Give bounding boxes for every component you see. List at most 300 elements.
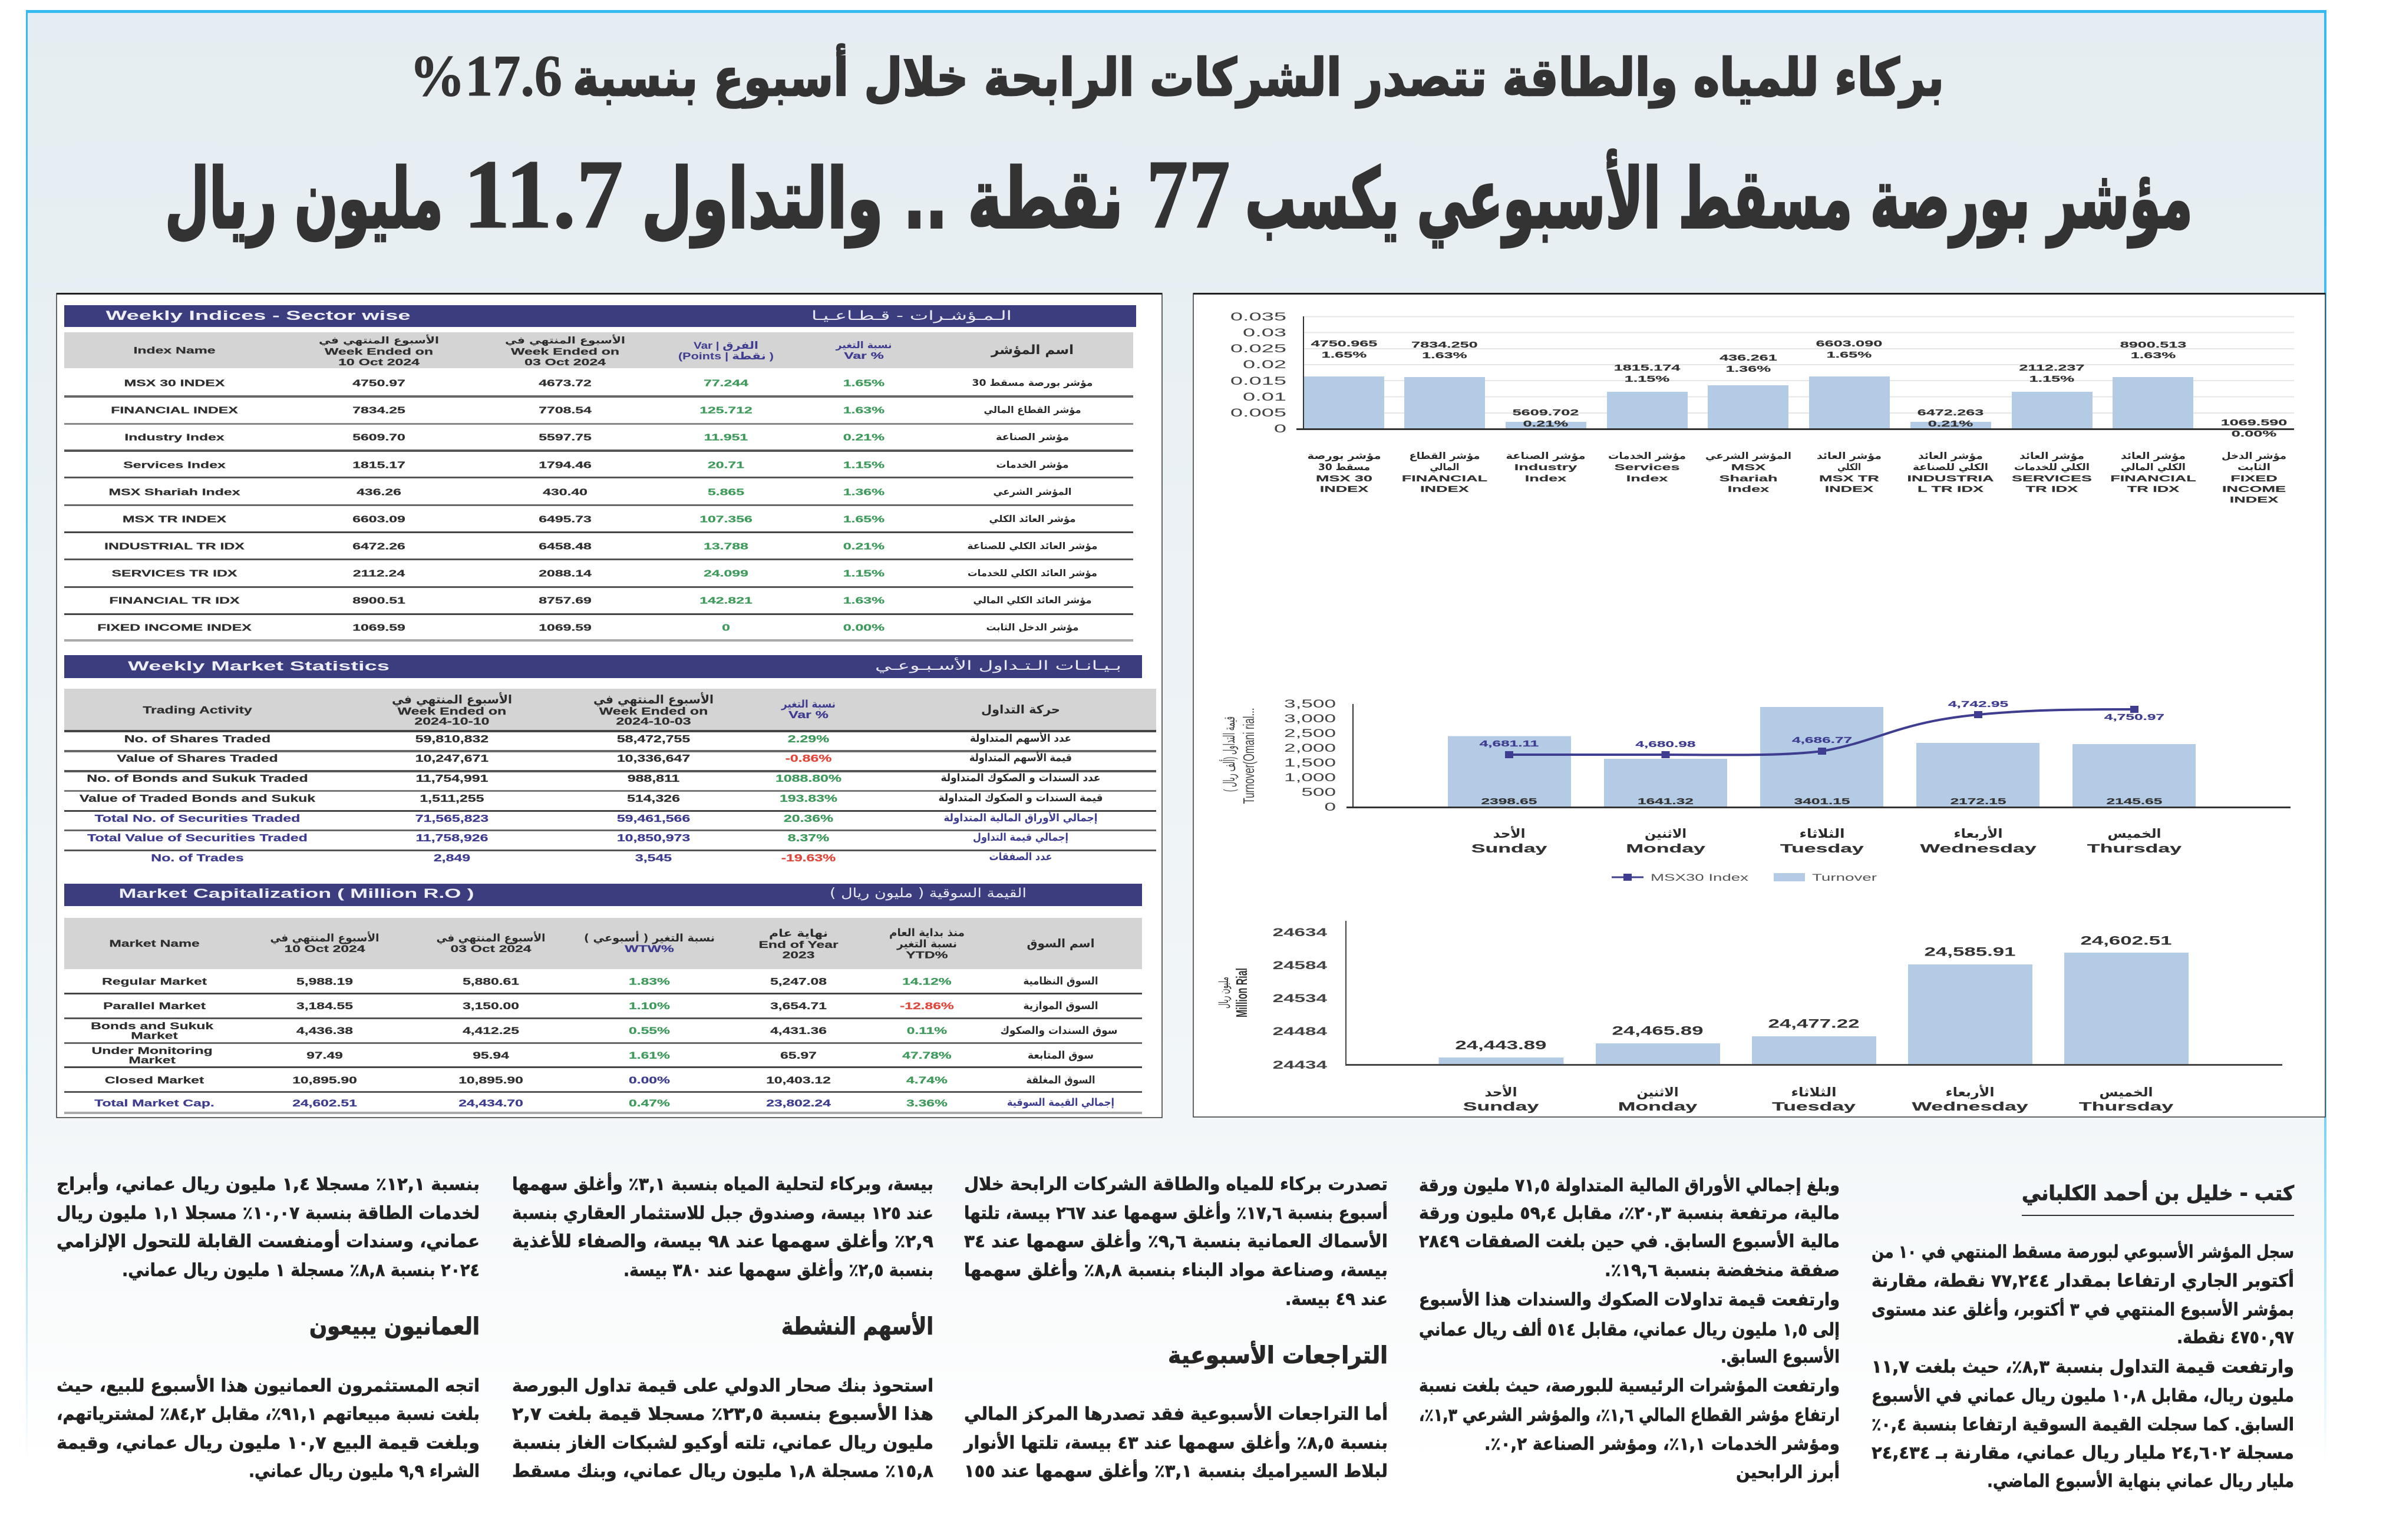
rows: indices: MSX 30 INDEX — [124, 378, 225, 388]
text block: gainers continued: ٢,٩٪ وأغلق سهمها عند ٩٨ بيسة، والصفاء للأغذية — [512, 1230, 933, 1252]
rows: capitalization: 0.11% — [907, 1026, 947, 1036]
data labels — [1455, 934, 2172, 1052]
rows: statistics: Total No. of Securities Traded — [95, 813, 300, 824]
category labels latin: SERVICES — [2012, 473, 2092, 483]
y axis labels: 2,000 — [1284, 742, 1336, 754]
value labels: 1.15% — [1625, 374, 1669, 384]
data labels: 4,750.97 — [2104, 712, 2164, 722]
rows: statistics: 10,850,973 — [617, 832, 690, 844]
rows: indices: Industry Index — [124, 432, 225, 442]
category labels latin: INDEX — [2230, 494, 2279, 504]
data labels: 2398.65 — [1481, 797, 1537, 807]
y axis labels: 0.035 — [1230, 311, 1286, 323]
category labels arabic: مؤشر العائد — [1817, 450, 1882, 461]
category labels latin: FINANCIAL — [1402, 473, 1487, 483]
rows: statistics: Value of Traded Bonds and Sukuk — [80, 793, 315, 804]
text block: weekly declines: لبلاط السيراميك بنسبة ٣,١٪ وأغلق سهمها عند ١٥٥ — [964, 1459, 1388, 1482]
data labels: 4,742.95 — [1948, 699, 2008, 709]
row lines: capitalization — [64, 993, 1142, 1114]
category labels arabic: مؤشر العائد — [1918, 450, 1983, 461]
rows: capitalization: Closed Market — [105, 1075, 204, 1086]
rows: indices: 0 — [722, 623, 730, 633]
category labels arabic: مؤشر الصناعة — [1506, 450, 1585, 461]
rows: indices: 7834.25 — [352, 405, 405, 415]
data labels: 24,443.89 — [1455, 1039, 1546, 1052]
day labels: الأحد — [1493, 825, 1525, 841]
table header row: statistics: الأسبوع المنتهي في — [593, 692, 714, 707]
rows: statistics: 58,472,755 — [617, 733, 690, 745]
rows: capitalization: 1.83% — [629, 976, 670, 987]
rows: indices: مؤشر الخدمات — [996, 459, 1069, 470]
table header row: statistics: Trading Activity — [143, 705, 252, 716]
rows: capitalization: Under Monitoring — [91, 1046, 213, 1056]
heading bar: weekly indices — [64, 305, 1136, 327]
text block: intro: سجل المؤشر الأسبوعي لبورصة مسقط المنتهي في ١٠ من — [1872, 1241, 2294, 1263]
text block: top gainers — [964, 1174, 1388, 1310]
rows: capitalization: 10,895.90 — [458, 1075, 523, 1086]
rows: indices: مؤشر القطاع المالي — [984, 404, 1081, 416]
article column 4 — [512, 1172, 933, 1482]
text block: active stocks continued: عماني، وسندات أومنفست القابلة للتحول الإلزامي — [57, 1230, 480, 1252]
table header row: capitalization: 2023 — [783, 950, 814, 961]
value labels: 6603.090 — [1816, 338, 1882, 348]
rows: indices: MSX Shariah Index — [108, 487, 240, 497]
table header row: capitalization — [64, 918, 1142, 969]
rows: statistics: 2,849 — [434, 852, 470, 864]
rows: indices: 1069.59 — [352, 623, 405, 633]
value labels: 5609.702 — [1513, 407, 1579, 417]
rows: statistics: 2.29% — [788, 733, 829, 745]
rows: capitalization: 1.61% — [629, 1050, 670, 1061]
y axis labels: 0 — [1324, 801, 1336, 813]
heading bar: market capitalization — [64, 884, 1142, 906]
rows: indices: 20.71 — [708, 460, 744, 470]
row lines: indices — [64, 395, 1133, 642]
category labels latin: FINANCIAL — [2110, 473, 2196, 483]
legend — [1612, 872, 1877, 883]
category labels arabic: مؤشر الدخل — [2222, 450, 2286, 461]
category labels arabic: مؤشر العائد — [2019, 450, 2084, 461]
day labels: Monday — [1626, 842, 1705, 855]
rows: indices: 6495.73 — [539, 514, 592, 524]
MSX30 index line — [1505, 706, 2138, 758]
table header row: indices: Week Ended on — [511, 347, 619, 357]
rows: indices: مؤشر بورصة مسقط 30 — [972, 377, 1093, 388]
day labels: الأربعاء — [1946, 1084, 1994, 1099]
rows: capitalization: Parallel Market — [103, 1001, 206, 1012]
rows: capitalization: 10,403.12 — [766, 1075, 831, 1086]
panel: charts — [1193, 293, 2325, 1117]
text block: active stocks: ١٥,٨٪ مسجلة ١,٨ مليون ريال عماني، وبنك مسقط — [512, 1461, 933, 1482]
category labels latin: INDEX — [1320, 484, 1369, 494]
rows: indices: 107.356 — [699, 514, 753, 524]
rows: indices: FIXED INCOME INDEX — [97, 623, 252, 633]
rows: statistics: 71,565,823 — [415, 813, 489, 824]
article column 2: وارتفعت المؤشرات الرئيسية للبورصة، حيث بلغت نسبة — [1419, 1376, 1840, 1396]
day labels: Sunday — [1471, 842, 1547, 855]
rows: indices: FINANCIAL TR IDX — [109, 596, 240, 606]
rows: indices: FINANCIAL INDEX — [111, 405, 238, 415]
rows: indices: 5597.75 — [539, 432, 592, 442]
rows: statistics: 1088.80% — [775, 773, 841, 784]
text block: Omanis sell: بلغت نسبة مبيعاتهم ٩١,١٪، مقابل ٨٤,٢٪ لمشترياتهم، — [57, 1404, 480, 1425]
rows: statistics: No. of Shares Traded — [124, 733, 270, 745]
text block: active stocks: استحوذ بنك صحار الدولي على قيمة تداول البورصة — [512, 1376, 933, 1396]
article column 2: صفقة منخفضة بنسبة ١٩,٦٪. — [1605, 1260, 1840, 1281]
text block: gainers continued: بنسبة ٢,٥٪ وأغلق سهمها عند ٣٨٠ بيسة. — [623, 1258, 933, 1281]
category labels latin: MSX — [1731, 462, 1766, 472]
day labels: Wednesday — [1912, 1101, 2028, 1113]
article column 2: مالية الأسبوع السابق. في حين بلغت الصفقات ٢٨٤٩ — [1419, 1230, 1840, 1252]
category labels arabic: مؤشر القطاع — [1410, 450, 1480, 461]
day labels: الأربعاء — [1954, 825, 2002, 841]
table: weekly market statistics — [64, 655, 1156, 864]
text block: active stocks: هذا الأسبوع بنسبة ٢٣,٥٪ مسجلا قيمة بلغت ٢,٧ — [512, 1403, 933, 1425]
table header row: capitalization: اسم السوق — [1027, 936, 1095, 950]
article column 2: ارتفاع مؤشر القطاع المالي ١,٦٪، والمؤشر الشرعي ١,٣٪، — [1419, 1405, 1840, 1426]
rows: indices: 1.63% — [843, 405, 885, 415]
rows: capitalization: 4,436.38 — [296, 1026, 353, 1036]
category labels arabic: مسقط 30 — [1318, 461, 1370, 472]
text block: top gainers: بيسة، وصناعة مواد البناء بنسبة ٨,٨٪ وأغلق سهمها — [964, 1258, 1388, 1281]
y axis title — [1216, 968, 1250, 1017]
value labels: 1.15% — [2029, 374, 2074, 384]
title: subheading: %17.6 — [410, 43, 562, 108]
data labels: 4,686.77 — [1792, 735, 1852, 745]
text block: Omanis sell: وبلغت قيمة البيع ١٠,٧ مليون ريال عماني، وقيمة — [57, 1433, 480, 1453]
heading: weekly declines: التراجعات الأسبوعية — [1168, 1340, 1388, 1369]
rows: capitalization: -12.86% — [900, 1001, 954, 1012]
rows: capitalization: 3,654.71 — [770, 1001, 827, 1012]
heading bar: market statistics — [64, 655, 1142, 678]
rows: capitalization: 4,431.36 — [770, 1026, 827, 1036]
rows: statistics: 11,754,991 — [415, 773, 488, 784]
rows: capitalization: 5,988.19 — [296, 976, 353, 987]
legend: MSX30 Index — [1651, 872, 1749, 883]
text block: gainers continued — [512, 1172, 933, 1281]
table header row: indices — [64, 332, 1133, 368]
text block: Omanis sell: الشراء ٩,٩ مليون ريال عماني. — [249, 1461, 480, 1482]
rows: statistics: إجمالي الأوراق المالية المتداولة — [944, 811, 1097, 824]
rows: capitalization: 5,880.61 — [463, 976, 519, 987]
y axis labels: 24534 — [1273, 992, 1327, 1004]
text block: intro: مليار ريال عماني بنهاية الأسبوع الماضي. — [1987, 1470, 2294, 1492]
data labels: 4,680.98 — [1635, 739, 1696, 749]
rows: capitalization: 3,184.55 — [296, 1001, 353, 1012]
rows: indices: 13.788 — [704, 541, 748, 551]
title: main headline: نقطة .. والتداول — [642, 151, 1123, 248]
y axis labels: 1,000 — [1284, 771, 1336, 784]
day labels: الخميس — [2099, 1085, 2153, 1099]
value labels: 1.63% — [2131, 350, 2176, 360]
category labels arabic: الثابت — [2237, 461, 2270, 472]
gridlines — [1303, 317, 2294, 413]
rows: capitalization: 65.97 — [780, 1050, 817, 1061]
table header row: statistics: 2024-10-03 — [616, 716, 691, 727]
rows: capitalization: 0.47% — [629, 1098, 670, 1109]
rows: indices: 6472.26 — [352, 541, 405, 551]
value labels: 7834.250 — [1411, 339, 1478, 349]
rows: indices: 2112.24 — [353, 569, 405, 579]
y axis title: ( قيمة التداول (ألف ريال — [1219, 716, 1239, 792]
heading bar: weekly indices: Weekly Indices - Sector wise — [106, 308, 410, 323]
rows: statistics: قيمة السندات و الصكوك المتداولة — [938, 792, 1103, 804]
day labels: Wednesday — [1920, 842, 2037, 855]
category labels arabic: الكلي المالي — [2121, 461, 2186, 473]
y axis labels: 0.03 — [1243, 327, 1286, 339]
rows: statistics: عدد السندات و الصكوك المتداولة — [940, 772, 1101, 784]
rows: indices: 6458.48 — [539, 541, 592, 551]
axes — [1296, 316, 2294, 430]
y axis labels: 0.005 — [1230, 407, 1286, 419]
rows: statistics: 514,326 — [627, 793, 680, 804]
rows: indices: 4750.97 — [352, 378, 405, 388]
rows: capitalization: 3,150.00 — [463, 1001, 519, 1012]
y axis labels — [1284, 698, 1336, 813]
category labels latin: INCOME — [2222, 484, 2286, 494]
article column 1 — [1872, 1180, 2294, 1492]
rows: statistics: 3,545 — [635, 852, 672, 864]
title: subheading: بركاء للمياه والطاقة تتصدر الشركات الرابحة خلال أسبوع بنسبة — [573, 44, 1944, 108]
y axis labels — [1230, 311, 1286, 435]
rows: indices: 1794.46 — [539, 460, 592, 470]
category labels latin: FIXED — [2230, 473, 2278, 483]
rows: capitalization — [91, 975, 1117, 1109]
rows: indices: 5609.70 — [352, 432, 405, 442]
article column 2: الأسبوع السابق. — [1721, 1346, 1840, 1367]
y axis labels: 3,000 — [1284, 712, 1336, 725]
rows: indices: 1.36% — [843, 487, 885, 497]
category labels latin — [1316, 462, 2286, 504]
category labels latin: MSX 30 — [1316, 473, 1372, 483]
heading: active stocks: الأسهم النشطة — [781, 1311, 933, 1340]
text block: weekly declines — [963, 1402, 1388, 1482]
data labels — [1480, 699, 2164, 807]
rows: capitalization: Bonds and Sukuk — [91, 1021, 213, 1032]
axes — [1346, 704, 2291, 808]
y axis labels: 24634 — [1273, 926, 1327, 938]
rows: statistics: 59,461,566 — [617, 813, 690, 824]
rows: capitalization: 95.94 — [473, 1050, 509, 1061]
text block: gainers continued: عند ١٢٥ بيسة، وصندوق جبل للاستثمار العقاري بنسبة — [512, 1203, 933, 1224]
data labels: 3401.15 — [1794, 797, 1850, 807]
table header row: indices: Week Ended on — [325, 347, 433, 357]
text block: Omanis sell: اتجه المستثمرون العمانيون هذا الأسبوع للبيع، حيث — [57, 1374, 480, 1396]
text block: intro: بمؤشر الأسبوع المنتهي في ٣ أكتوبر، وأغلق عند مستوى — [1872, 1298, 2294, 1320]
table header row: indices: (Points | نقطة ) — [678, 351, 774, 362]
category labels latin: TR IDX — [2026, 484, 2078, 494]
day labels — [1463, 1084, 2173, 1113]
category labels arabic: المالي — [1430, 461, 1459, 473]
y axis labels: 1,500 — [1284, 756, 1336, 769]
table header row: statistics: نسبة التغير — [781, 698, 836, 710]
value labels: 1069.590 — [2221, 417, 2287, 427]
table header row: statistics: Var % — [788, 709, 829, 721]
data labels: 2145.65 — [2107, 797, 2163, 807]
rows: statistics: عدد الصفقات — [989, 851, 1052, 863]
rows: statistics — [80, 732, 1103, 864]
y axis title: Million Rial — [1233, 968, 1250, 1017]
value labels — [1311, 338, 2287, 438]
day labels: Sunday — [1463, 1101, 1539, 1113]
table: market capitalization — [64, 884, 1142, 1114]
text block: intro: ٤٧٥٠,٩٧ نقطة. — [2177, 1327, 2294, 1348]
rows: capitalization: Total Market Cap. — [94, 1098, 214, 1109]
category labels latin: L TR IDX — [1918, 484, 1984, 494]
rows: capitalization: السوق الموازية — [1023, 1000, 1098, 1012]
rows: indices: 142.821 — [699, 596, 753, 606]
rows: capitalization: 5,247.08 — [770, 976, 827, 987]
rows: capitalization: 4.74% — [906, 1075, 948, 1086]
rows: indices: Services Index — [123, 460, 226, 470]
table header row: statistics: Week Ended on — [398, 706, 506, 717]
article column 3 — [963, 1174, 1388, 1482]
rows: indices: مؤشر العائد الكلي المالي — [973, 594, 1091, 606]
category labels arabic: المؤشر الشرعي — [1705, 450, 1791, 462]
rows: indices: 11.951 — [704, 432, 748, 442]
bars — [1439, 953, 2189, 1065]
text block: intro: مليون ريال، مقابل ١٠,٨ مليون ريال عماني في الأسبوع — [1872, 1384, 2294, 1406]
title: main headline: 11.7 — [463, 140, 623, 249]
category labels arabic — [1307, 450, 2286, 473]
axes — [1345, 921, 2282, 1066]
heading bar: market statistics: Weekly Market Statistics — [128, 659, 390, 673]
data labels: 4,681.11 — [1480, 739, 1539, 749]
value labels: 436.261 — [1720, 352, 1777, 362]
text block: top gainers: تصدرت بركاء للمياه والطاقة الشركات الرابحة خلال — [964, 1174, 1388, 1195]
rows: indices: 0.21% — [843, 432, 885, 442]
text block: active stocks continued: ٢٠٢٤ بنسبة ٨,٨٪ مسجلة ١ مليون ريال عماني. — [122, 1260, 480, 1281]
rows: capitalization: 97.49 — [306, 1050, 343, 1061]
table header row: indices: Var % — [844, 351, 884, 361]
table header row: capitalization: نهاية عام — [769, 927, 828, 940]
rows: statistics: إجمالي قيمة التداول — [973, 831, 1068, 844]
rows: indices: مؤشر العائد الكلي — [989, 513, 1076, 525]
rows: indices: 5.865 — [708, 487, 744, 497]
category labels latin: INDUSTRIA — [1907, 473, 1994, 483]
value labels: 6472.263 — [1918, 407, 1984, 417]
bars — [1303, 376, 2193, 429]
text block: top gainers: الأسماك العمانية بنسبة ٩,٦٪ وأغلق سهمها عند ٣٤ — [964, 1230, 1388, 1252]
text block: active stocks: مليون ريال عماني، تلته أوكيو لشبكات الغاز بنسبة — [512, 1431, 933, 1453]
rows: indices: 0.00% — [843, 623, 885, 633]
rows: capitalization: 23,802.24 — [766, 1098, 831, 1109]
rows: capitalization: 10,895.90 — [292, 1075, 357, 1086]
text block: gainers continued: بيسة، وبركاء لتحلية المياه بنسبة ٣,١٪ وأغلق سهمها — [512, 1172, 933, 1195]
rows: capitalization: 24,434.70 — [458, 1098, 523, 1109]
rows: indices: 4673.72 — [539, 378, 592, 388]
text block: intro — [1872, 1241, 2294, 1492]
category labels latin: Index — [1728, 484, 1769, 494]
rows: statistics: 1,511,255 — [420, 793, 484, 804]
rows: indices: 436.26 — [357, 487, 401, 497]
legend: Turnover — [1812, 872, 1877, 883]
rows: indices: 7708.54 — [539, 405, 592, 415]
category labels latin: MSX TR — [1819, 473, 1879, 483]
value labels: 1.65% — [1827, 349, 1872, 359]
value labels: 4750.965 — [1311, 338, 1377, 348]
rows: indices: 2088.14 — [539, 569, 592, 579]
chart: market capitalization by day — [1216, 921, 2282, 1113]
day labels: الاثنين — [1637, 1085, 1678, 1099]
rows: statistics: 10,247,671 — [415, 753, 489, 764]
day labels — [1471, 825, 2182, 855]
rows: indices: 8900.51 — [352, 596, 405, 606]
rows: capitalization: 47.78% — [902, 1050, 952, 1061]
text block: intro: وارتفعت قيمة التداول بنسبة ٨,٣٪، حيث بلغت ١١,٧ — [1872, 1357, 2294, 1377]
category labels latin: Index — [1626, 473, 1668, 483]
article column 2: مالية، مرتفعة بنسبة ٢٠,٣٪، مقابل ٥٩,٤ مليون ورقة — [1419, 1203, 1840, 1224]
value labels: 1.63% — [1422, 350, 1467, 360]
title: main headline: 77 — [1146, 140, 1230, 249]
data labels: 2172.15 — [1951, 797, 2006, 807]
rows: capitalization: سوق المتابعة — [1028, 1049, 1094, 1062]
data labels: 24,465.89 — [1612, 1024, 1704, 1038]
rows: indices: مؤشر الصناعة — [996, 431, 1069, 442]
table header row: capitalization: WTW% — [625, 944, 674, 954]
y axis labels: 24484 — [1273, 1025, 1327, 1037]
rows: indices: 1.65% — [843, 514, 885, 524]
rows: indices: مؤشر الدخل الثابت — [986, 622, 1078, 633]
rows: indices: المؤشر الشرعي — [994, 486, 1071, 498]
category labels arabic: مؤشر العائد — [2121, 450, 2186, 461]
title: main headline: مليون ريال — [165, 151, 443, 248]
day labels: الخميس — [2107, 827, 2161, 841]
y axis labels: 0 — [1274, 423, 1286, 435]
rows: statistics: -19.63% — [781, 852, 836, 864]
category labels arabic: الكلي للصناعة — [1913, 461, 1988, 473]
y axis labels: 3,500 — [1284, 698, 1336, 710]
chart: turnover and MSX30 index — [1219, 698, 2291, 883]
rows: indices: 1069.59 — [539, 623, 592, 633]
table header row: indices: 10 Oct 2024 — [338, 358, 420, 368]
rows: statistics: 11,758,926 — [415, 832, 488, 844]
table header row: capitalization: Market Name — [109, 938, 200, 949]
text block: intro: السابق. كما سجلت القيمة السوقية ارتفاعا بنسبة ٠,٤٪ — [1872, 1415, 2294, 1435]
rows: indices: 1.15% — [843, 569, 885, 579]
table header row: capitalization: End of Year — [758, 940, 839, 950]
table header row: indices: Index Name — [133, 346, 216, 356]
rows: statistics: No. of Bonds and Sukuk Traded — [87, 773, 308, 784]
rows: statistics: 988,811 — [628, 773, 679, 784]
rows: statistics: Value of Shares Traded — [117, 753, 278, 764]
table header row: indices: نسبة التغير — [835, 339, 892, 351]
table header row: indices: الأسبوع المنتهي في — [319, 335, 439, 346]
rows: capitalization: 24,602.51 — [292, 1098, 357, 1109]
text block: intro: أكتوبر الجاري ارتفاعا بمقدار ٧٧,٢٤٤ نقطة، مقارنة — [1872, 1269, 2294, 1291]
table: weekly indices sector wise — [64, 305, 1136, 642]
data labels: 24,585.91 — [1925, 945, 2016, 959]
rows: indices: 1815.17 — [352, 460, 405, 470]
rows: indices: 430.40 — [543, 487, 588, 497]
table header row: capitalization: 03 Oct 2024 — [451, 944, 532, 954]
category labels latin: INDEX — [1420, 484, 1469, 494]
value labels: 1815.174 — [1614, 362, 1681, 372]
category labels latin: Services — [1615, 462, 1680, 472]
day labels: Tuesday — [1780, 842, 1864, 855]
y axis labels: 500 — [1301, 786, 1336, 798]
rows: statistics: 59,810,832 — [415, 733, 489, 745]
chart: weekly index change by sector — [1230, 311, 2294, 504]
heading bar: market statistics: بـيـانـات الـتـداول الأسـبـوعـي — [875, 657, 1121, 673]
text block: active stocks continued: لخدمات الطاقة بنسبة ١٠,٠٧٪ مسجلا ١,١ مليون ريال — [57, 1203, 480, 1224]
y axis labels: 24434 — [1273, 1058, 1327, 1071]
rows: statistics: عدد الأسهم المتداولة — [970, 732, 1071, 745]
rows: indices: 125.712 — [699, 405, 753, 415]
y axis labels — [1273, 926, 1327, 1071]
table header row: capitalization: YTD% — [906, 950, 948, 961]
article column 2 — [1419, 1174, 1840, 1483]
